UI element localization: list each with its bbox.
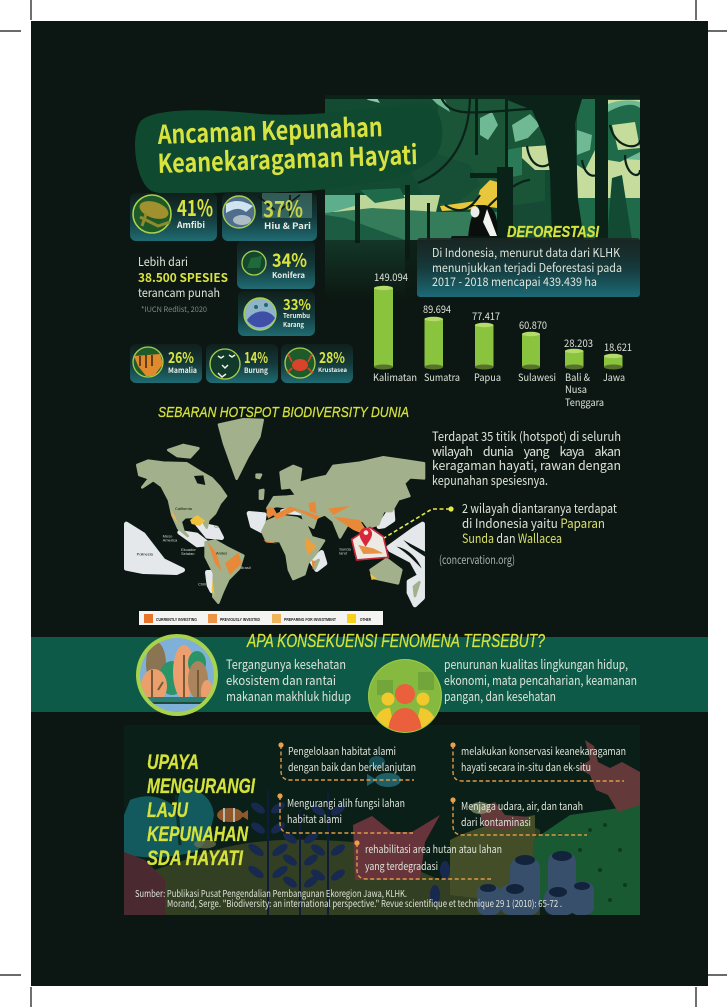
text block: hotspots: kepunahan spesiesnya. [432,470,548,489]
bar chart: deforestation by region: Nusa [565,381,587,396]
ground layers [325,208,500,240]
icon: people and sectors [368,659,442,736]
map labels: Selatan [181,551,195,556]
map labels: California [175,506,193,511]
stat card: Terumbu Karang: Karang [283,319,304,329]
text block: Indonesia hotspots: di Indonesia yaitu Paparan [462,513,605,532]
text block: hotspots: keragaman hayati, rawan dengan [432,455,621,474]
hanging lianas [418,95,640,210]
band: consequences [31,631,708,716]
stat card: Terumbu Karang: Terumbu [283,310,310,320]
stat card: Amfibi: 41% [177,191,213,223]
pink coral top right [578,740,640,812]
stat card: Burung [206,344,278,383]
stat text: species threatened: Lebih dari [138,253,188,270]
panel: deforestation: Di Indonesia, menurut data dari KLHK [432,244,620,261]
text block: hotspots: Terdapat 35 titik (hotspot) di seluruh [432,426,621,445]
action: habitat management [278,742,416,780]
sources: Sumber: Publikasi Pusat Pengendalian Pembangunan Ekoregion Jawa, KLHK. [135,886,407,900]
bar chart: deforestation by region: Kalimatan [373,369,417,384]
icon: map pin [360,528,372,547]
panel: reef illustration [124,725,640,915]
illustration: jungle forest [325,95,640,300]
icon: teal fish [367,756,401,787]
teal coral [124,789,214,857]
map labels: Chili [198,581,206,586]
text block: hotspots: wilayah dunia yang kaya akan [432,441,621,460]
icon: crab [285,348,315,378]
bar chart: deforestation by region: 149.094 [374,269,408,284]
bar chart: deforestation by region: Papua [474,369,501,384]
stat card: Mamalia: 26% [168,347,194,368]
sunlit yellow patch [475,180,497,208]
bar chart: deforestation by region: 89.694 [423,301,451,316]
legend: OTHER [360,617,371,623]
icon: pale fish [470,802,490,814]
text block: Indonesia hotspots: 2 wilayah diantaranya terdapat [462,498,617,517]
action: conservation: melakukan konservasi keanekaragaman [461,744,626,759]
action: pollution [450,797,587,835]
text: wider impacts [444,654,637,705]
map labels: Brasil [241,565,251,570]
dark pink coral left [124,852,165,915]
stat card: Konifera: 34% [272,246,307,273]
stat card: Mamalia [130,344,202,383]
bar chart: deforestation by region: Sumatra [424,369,460,384]
bar chart: deforestation by region: Bali & [565,369,590,384]
stat card: Terumbu Karang [238,291,315,336]
text: ecosystem health: makanan makhluk hidup [226,686,351,705]
icon: shark and ray [223,196,255,228]
text block: Indonesia hotspots [439,498,617,568]
sponge tubes [477,852,594,915]
heading: consequences: APA KONSEKUENSI FENOMENA TERSEBUT? [246,631,545,651]
stat card: Burung: Burung [244,365,268,376]
stat card: Konifera: Konifera [272,270,305,281]
bar chart: deforestation by region [373,269,632,409]
map labels: Sunda [339,546,352,551]
stat card: Burung: 14% [244,347,268,368]
callout line to Indonesia [384,506,454,538]
map labels: Meso [163,533,173,538]
action: pollution: dari kontaminasi [461,815,531,830]
icon: birds [210,349,240,379]
icon: clownfish [217,808,248,822]
bar chart: deforestation by region: 77.417 [472,308,500,323]
legend: PREVIOUSLY INVESTED [220,617,260,623]
bar chart: deforestation by region: Jawa [603,369,625,384]
map labels: Polinesia [137,552,154,557]
panel: deforestation [417,224,640,297]
text: ecosystem health [226,654,351,705]
legend: CURRENTLY INVESTING [156,617,197,623]
title: Keanekaragaman Hayati [157,135,418,181]
heading: hotspot map: SEBARAN HOTSPOT BIODIVERSITY DUNIA [158,404,409,421]
blue plants [246,790,450,915]
icon: monkey [451,205,501,241]
sources [135,886,562,910]
icon: conifer [242,251,266,275]
stat text: species threatened [138,253,228,315]
pink coral centre [353,815,440,880]
legend [139,611,383,625]
stat text: species threatened: *IUCN Redlist, 2020 [141,304,207,315]
ground [155,828,540,915]
stat card: Krustasea [281,344,353,383]
distant sky right [577,100,640,200]
mid canopy and light patches [438,97,545,205]
heading: efforts: SDA HAYATI [147,847,244,870]
stat card: Amfibi: Amfibi [176,219,205,231]
map labels: land [339,550,347,555]
stat card: Krustasea: 28% [319,347,345,368]
bar chart: deforestation by region: Sulawesi [518,369,556,384]
stat card: Hiu & Pari: Hiu & Pari [264,220,311,232]
stat card: Hiu & Pari [222,192,317,241]
Indonesia highlighted region [352,527,388,560]
text block: hotspots [432,426,621,489]
heading: DEFORESTASI: DEFORESTASI [507,224,599,241]
action: pollution: Menjaga udara, air, dan tanah [461,799,583,814]
action: rehabilitation: rehabilitasi area hutan atau lahan [365,842,502,857]
text: wider impacts: ekonomi, mata pencaharian, keamanan [444,670,637,689]
map labels: Andes [216,550,227,555]
stat card: Terumbu Karang: 33% [283,294,311,315]
action: habitat management: Pengelolaan habitat alami [288,744,396,759]
action: land conversion: Mengurangi alih fungsi lahan [287,796,405,811]
heading: efforts: UPAYA [147,751,199,774]
legend: PREPARING FOR INVESTMENT [284,617,336,623]
map labels: Ekuador [181,547,197,552]
action: habitat management: dengan baik dan berkelanjutan [288,760,416,775]
stat text: species threatened: terancam punah [138,284,220,301]
heading: efforts: LAJU [147,799,189,822]
text block: Indonesia hotspots: Sunda dan Wallacea [462,528,562,547]
map labels [137,506,352,586]
heading: efforts: KEPUNAHAN [147,823,249,846]
icon: muted fish [194,840,216,848]
bar chart: deforestation by region: 28.203 [564,335,593,350]
title blob [135,103,442,194]
title: Ancaman Kepunahan [156,107,383,152]
pale band on left [325,195,440,212]
action: rehabilitation [354,840,502,879]
map labels: Caribbean [214,523,233,528]
action: land conversion: habitat alami [287,812,342,827]
icon: damaged forest [136,634,220,716]
text: ecosystem health: Tergangunya kesehatan [226,654,346,673]
map labels: America [163,537,178,542]
action: rehabilitation: yang terdegradasi [365,859,438,874]
stat card: Mamalia: Mamalia [168,365,197,376]
panel: deforestation: menunjukkan terjadi Deforestasi pada [432,259,622,276]
text: wider impacts: penurunan kualitas lingkungan hidup, [444,654,628,673]
action: conservation [450,742,626,781]
text: ecosystem health: ekosistem dan rantai [226,670,336,689]
stat card: Amfibi [130,191,217,241]
stat card: Hiu & Pari: 37% [263,192,303,224]
panel: deforestation: 2017 - 2018 mencapai 439.439 ha [432,273,597,290]
bar chart: deforestation by region: 18.621 [604,339,632,354]
icon: tiger [133,347,163,377]
green coral right [533,805,640,915]
heading: efforts: MENGURANGI [147,775,256,798]
title [156,107,418,181]
bar chart: deforestation by region: Tenggara [565,394,604,409]
tree trunks [325,95,640,243]
stat card: Krustasea: Krustasea [318,365,347,374]
action: conservation: hayati secara in-situ dan ek-situ [461,760,591,775]
heading: efforts [147,751,256,870]
text: wider impacts: pangan, dan kesehatan [444,686,556,705]
text block: Indonesia hotspots: (concervation.org) [439,552,515,568]
stat card: Konifera [237,241,315,289]
sources: Morand, Serge. "Biodiversity: an international perspective." Revue scientifique et technique 29 1 (2010): 65-72 . [167,896,562,910]
world map of biodiversity hotspots [126,419,425,605]
land [137,461,226,536]
icon: frog [133,195,171,233]
bar chart: deforestation by region: 60.870 [519,317,547,332]
icon: coral reef [244,298,276,330]
action: land conversion [277,793,413,833]
stat text: species threatened: 38.500 SPESIES [138,269,228,286]
